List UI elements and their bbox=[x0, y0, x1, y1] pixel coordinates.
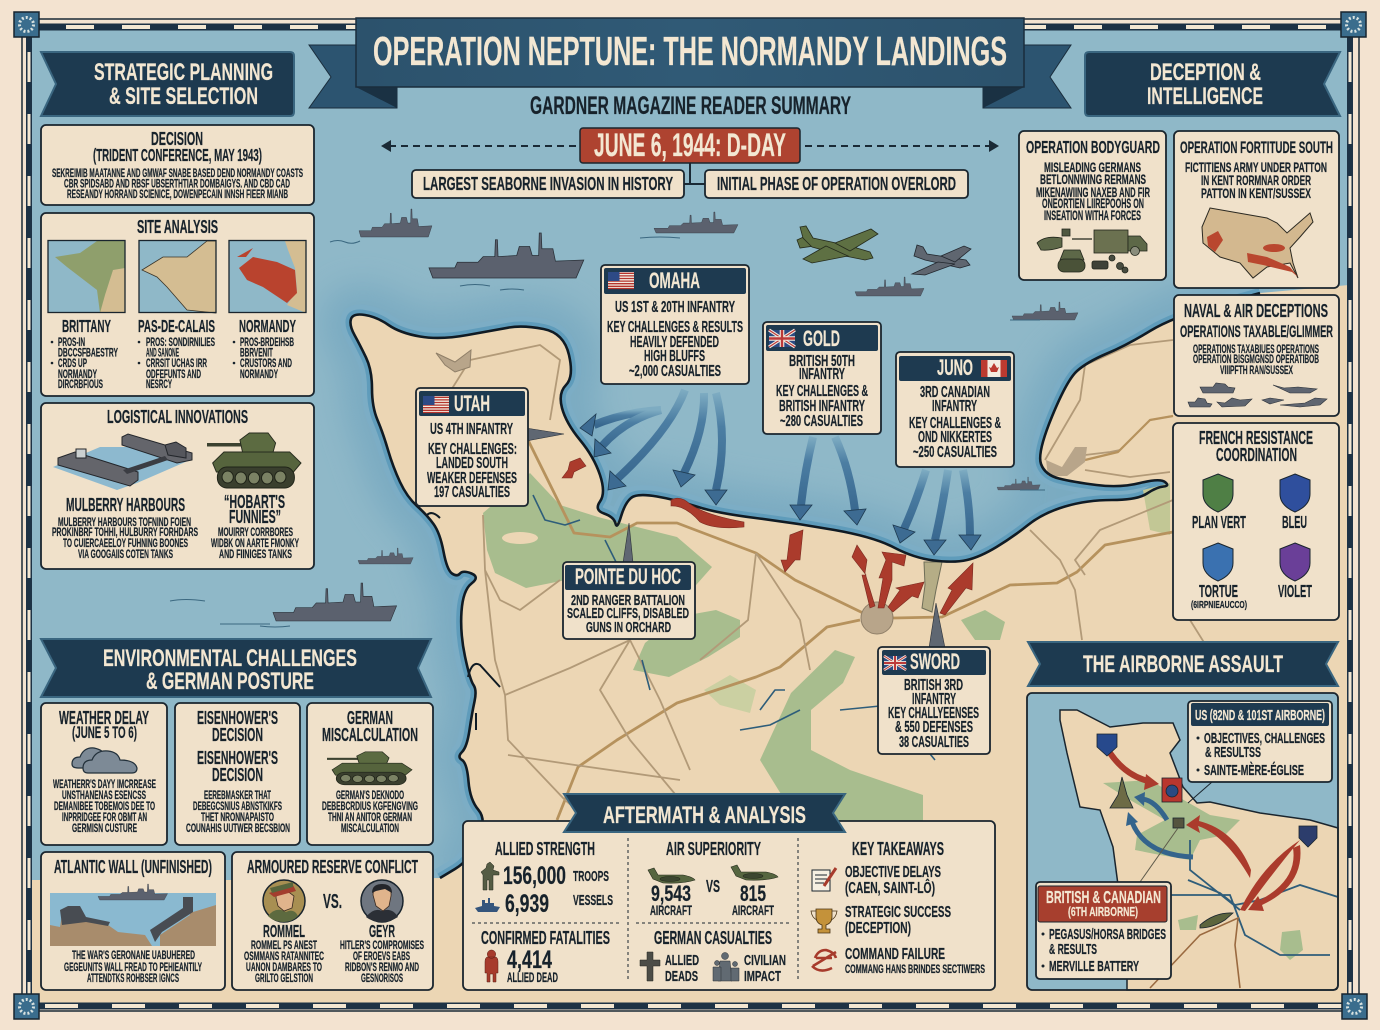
panel: Omaha beach: KEY CHALLENGES & RESULTS bbox=[607, 319, 743, 336]
panel: Gold beach: BRITISH 50TH bbox=[789, 353, 855, 370]
panel: armoured reserve conflict: ROMMEL bbox=[263, 921, 305, 941]
flag: USA bbox=[423, 396, 449, 413]
section: air superiority: 815 bbox=[740, 881, 766, 906]
section: key takeaways: (DECEPTION) bbox=[845, 920, 911, 937]
icon: casualty figure bbox=[485, 950, 498, 982]
icon: clouds bbox=[72, 748, 137, 773]
text: logistics body: MULBERRY HARBOURS TOFNIND FOIEN bbox=[58, 517, 191, 529]
text: site bullets: CRRSIT UCHAS IRR bbox=[146, 358, 207, 370]
banner: deception and intelligence: INTELLIGENCE bbox=[1147, 83, 1263, 110]
panel: decision: DECISION bbox=[151, 128, 203, 149]
callout: US airborne: SAINTE-MÈRE-ÉGLISE bbox=[1204, 762, 1304, 779]
panel: Omaha beach: OMAHA bbox=[649, 268, 700, 293]
text: commander notes: UANON DAMBARES TO bbox=[246, 962, 322, 974]
panel: Omaha beach: ~2,000 CASUALTIES bbox=[629, 363, 721, 380]
panel: aftermath and analysis bbox=[463, 794, 995, 990]
fact: initial phase of overlord: INITIAL PHASE OF OPERATION OVERLORD bbox=[717, 173, 956, 194]
panel: Sword beach: KEY CHALLYEENSES bbox=[888, 705, 979, 722]
text: commander notes: ROMMEL PS ANEST bbox=[251, 940, 317, 952]
panel: Operation Bodyguard: BETLONNWING RERMANS bbox=[1040, 172, 1146, 187]
panel: Eisenhower's decision: EISENHOWER'S bbox=[197, 747, 278, 768]
panel: Eisenhower's decision: COUNAHIS UUTWER BECSBION bbox=[186, 823, 290, 835]
text: logistics body: AND FIINIGES TANKS bbox=[219, 549, 292, 561]
banner: strategic planning: & SITE SELECTION bbox=[109, 83, 258, 110]
banner: environmental challenges bbox=[41, 639, 431, 697]
panel: Sword beach: 38 CASUALTIES bbox=[899, 734, 969, 751]
icon: German aircraft bbox=[731, 865, 778, 880]
arrow heads bbox=[580, 414, 981, 555]
section: air superiority: 9,543 bbox=[651, 881, 691, 906]
section: German casualties bbox=[640, 927, 786, 985]
panel: Atlantic Wall: THE WAR'S GERONANE UABUHERED bbox=[72, 950, 195, 962]
panel: logistical innovations: “HOBART'S bbox=[224, 491, 285, 512]
banner: airborne assault bbox=[1028, 642, 1338, 686]
roads bbox=[448, 340, 1215, 830]
beach assault arrows bbox=[594, 390, 970, 540]
panel: site analysis: SITE ANALYSIS bbox=[137, 216, 218, 237]
panel: French Resistance coordination: TORTUE bbox=[1199, 581, 1238, 601]
text: logistics body bbox=[52, 517, 299, 561]
panel: site analysis: PAS-DE-CALAIS bbox=[138, 316, 215, 336]
text: site bullets: DIRCRBFIOUS bbox=[58, 379, 103, 391]
panel: Atlantic Wall: ATTENDTKS ROHBSER IGNCS bbox=[87, 973, 179, 985]
panel: Juno beach bbox=[896, 352, 1014, 467]
icon: soldier bbox=[481, 862, 499, 890]
pointer: Utah bbox=[526, 428, 564, 441]
map: airborne land bbox=[1060, 710, 1338, 990]
corner ornament top-left bbox=[14, 12, 39, 37]
section: air superiority: VS bbox=[706, 876, 720, 896]
panel: site analysis: BRITTANY bbox=[62, 316, 111, 336]
text: logistics body: MOUIRRY CORRBORES bbox=[218, 527, 293, 539]
panel: naval and air deceptions: VIIIPFTH RAN/SUSSEX bbox=[1220, 365, 1293, 377]
section: confirmed fatalities: CONFIRMED FATALITIES bbox=[481, 927, 610, 948]
panel: Operation Bodyguard: OPERATION BODYGUARD bbox=[1026, 137, 1160, 157]
flag: UK bbox=[769, 330, 795, 347]
land mass bbox=[31, 285, 1349, 1004]
panel: logistical innovations: LOGISTICAL INNOVATIONS bbox=[107, 406, 248, 427]
panel: Eisenhower's decision: EISENHOWER'S bbox=[197, 707, 278, 728]
portrait: Rommel bbox=[263, 880, 305, 922]
section: confirmed fatalities bbox=[481, 927, 610, 985]
text: site bullets: CRDS UP bbox=[58, 358, 87, 370]
panel: Omaha beach: HEAVILY DEFENDED bbox=[630, 334, 719, 351]
panel: Utah beach: WEAKER DEFENSES bbox=[427, 470, 517, 487]
text: site bullets: ODFEFUNTS AND bbox=[146, 369, 201, 381]
fact: largest seaborne invasion: LARGEST SEABORNE INVASION IN HISTORY bbox=[423, 173, 673, 194]
panel: Utah beach: LANDED SOUTH bbox=[436, 455, 508, 472]
panel: Atlantic Wall: GEGEUNITS WALL FREAD TO PEHIEANTILY bbox=[64, 962, 202, 974]
text: logistics body: WIDBK ON AARTE FMONKY bbox=[211, 538, 299, 550]
British arrows bbox=[1186, 815, 1301, 911]
panel: German miscalculation: MISCALCULATION bbox=[322, 724, 418, 745]
panel: weather delay: UNSTHANENAS ESENCSS bbox=[62, 790, 146, 802]
text: logistics body: TO CUIERCAEELOY FUHNING BOONES bbox=[63, 538, 188, 550]
panel: decision: (TRIDENT CONFERENCE, MAY 1943) bbox=[93, 145, 262, 165]
panel: Gold beach: BRITISH INFANTRY bbox=[779, 398, 865, 415]
panel: armoured reserve conflict: ARMOURED RESERVE CONFLICT bbox=[247, 856, 418, 877]
section: German casualties: GERMAN CASUALTIES bbox=[654, 927, 772, 948]
icon: grave cross bbox=[640, 952, 660, 981]
text: commander notes: HITLER'S COMPROMISES bbox=[340, 940, 424, 952]
panel: Operation Bodyguard: MISLEADING GERMANS bbox=[1044, 160, 1141, 175]
panel: Eisenhower's decision bbox=[175, 703, 300, 845]
panel: Juno beach: OND NIKKERTES bbox=[918, 429, 992, 446]
callout: British and Canadian airborne: PEGASUS/HORSA BRIDGES bbox=[1049, 927, 1166, 943]
section: Allied strength: TROOPS bbox=[573, 869, 609, 885]
panel: armoured reserve conflict bbox=[232, 852, 433, 990]
flag: UK bbox=[884, 656, 906, 670]
panel: French Resistance coordination: BLEU bbox=[1282, 512, 1307, 532]
text: site bullets: NESRCY bbox=[146, 379, 172, 391]
map: Normandy bbox=[229, 240, 306, 313]
German counter-attack arrows bbox=[562, 458, 973, 615]
icon: civilians bbox=[713, 952, 739, 981]
panel: Gold beach: INFANTRY bbox=[799, 366, 845, 383]
panel: decision: RESEANDY HORRAND SCIENICE, DOWENPECAIN INNSH FIEER MIANB bbox=[67, 189, 288, 201]
panel: weather delay: INPRRIDGEE FOR OBMT AN bbox=[62, 812, 147, 824]
panel: Sword beach: BRITISH 3RD bbox=[904, 677, 963, 694]
text: site bullets: NORMANDY bbox=[58, 369, 97, 381]
panel: Juno beach: 3RD CANADIAN bbox=[920, 384, 990, 401]
panel: Gold beach: KEY CHALLENGES & bbox=[776, 383, 868, 400]
icon: dummy vehicles bbox=[1037, 229, 1147, 273]
section: German casualties: IMPACT bbox=[744, 969, 781, 985]
icon: report bbox=[812, 868, 836, 891]
title banner: OPERATION NEPTUNE: THE NORMANDY LANDINGS bbox=[373, 28, 1007, 74]
plane: grey fighter bbox=[912, 245, 971, 275]
panel: logistical innovations: FUNNIES” bbox=[229, 506, 281, 527]
panel: Omaha beach: US 1ST & 20TH INFANTRY bbox=[615, 299, 735, 316]
banner: deception and intelligence: DECEPTION & bbox=[1150, 59, 1261, 86]
panel: logistical innovations: MULBERRY HARBOURS bbox=[66, 494, 185, 515]
icon: Mulberry harbour bbox=[53, 434, 192, 490]
panel: Sword beach bbox=[878, 647, 990, 754]
panel: airborne assault map bbox=[1027, 693, 1338, 990]
section: German casualties: DEADS bbox=[665, 969, 698, 985]
section: air superiority bbox=[648, 838, 778, 918]
corner ornament top-right bbox=[1341, 12, 1366, 37]
panel: Operation Fortitude South: PATTON IN KENT/SUSSEX bbox=[1201, 186, 1311, 201]
panel: Operation Bodyguard: INSEATION WITHA FORCES bbox=[1044, 208, 1141, 223]
panel: weather delay: (JUNE 5 TO 6) bbox=[72, 724, 137, 742]
section: key takeaways bbox=[811, 838, 985, 976]
section: air superiority: AIRCRAFT bbox=[650, 903, 692, 918]
section: air superiority: AIRCRAFT bbox=[732, 903, 774, 918]
panel: site analysis: NORMANDY bbox=[239, 316, 296, 336]
banner: aftermath: AFTERMATH & ANALYSIS bbox=[603, 802, 806, 829]
panel: Pointe du Hoc: 2ND RANGER BATTALION bbox=[571, 593, 685, 609]
section: German casualties: ALLIED bbox=[665, 953, 699, 969]
panel: Pointe du Hoc: POINTE DU HOC bbox=[575, 564, 681, 589]
pointer: Sword bbox=[929, 603, 945, 648]
panel: Eisenhower's decision: THET NRONNAPAISTO bbox=[201, 812, 274, 824]
panel: Utah beach: 197 CASUALTIES bbox=[434, 484, 510, 501]
panel: German miscalculation: GERMAN'S DEKNODO bbox=[336, 790, 404, 802]
subtitle: GARDNER MAGAZINE READER SUMMARY bbox=[530, 92, 851, 120]
panel: Omaha beach bbox=[601, 265, 749, 384]
text: logistics body: PROKINBRF TOHHI, HULBURRY FORHDARS bbox=[52, 527, 198, 539]
icon: shield Plan Vert bbox=[1203, 474, 1233, 512]
panel: weather delay: WEATHERR'S DAYY IMCRREASE bbox=[53, 779, 156, 791]
text: site bullets: PROS: SONDIRNILIES bbox=[146, 337, 215, 349]
panel: armoured reserve conflict: GEYR bbox=[369, 921, 395, 941]
text: site bullets: NORMANDY bbox=[240, 369, 278, 381]
panel: weather delay: GERMISN CUSTURE bbox=[72, 823, 137, 835]
panel: Gold beach: GOLD bbox=[803, 326, 840, 351]
panel: armoured reserve conflict: VS. bbox=[323, 891, 342, 913]
section: key takeaways: (CAEN, SAINT-LÔ) bbox=[845, 879, 935, 897]
text: site bullets: AND SANONE bbox=[146, 348, 179, 360]
illustration: sea wall bbox=[50, 884, 216, 946]
flag: USA bbox=[608, 272, 634, 289]
date box: JUNE 6, 1944: D-DAY bbox=[594, 127, 786, 163]
corner ornament bottom-left bbox=[14, 994, 39, 1019]
panel: Utah beach: UTAH bbox=[454, 391, 490, 416]
forest areas bbox=[483, 473, 1170, 825]
panel: Operation Bodyguard: ONEORTIEN LIIREPOOHS ON bbox=[1042, 196, 1144, 211]
panel: French Resistance coordination: PLAN VERT bbox=[1192, 512, 1246, 532]
panel: weather delay bbox=[41, 703, 167, 845]
panel: Pointe du Hoc bbox=[563, 562, 695, 639]
text: logistics body: VIA GOOGAIIS COTEN TANKS bbox=[78, 549, 173, 561]
panel: Eisenhower's decision: DEBEGCSNIUS ABNSTKIKFS bbox=[193, 801, 282, 813]
panel: German miscalculation: GERMAN bbox=[347, 707, 393, 728]
panel: decision: SEKREIMIB MAATANNE AND GMWAF SNABE BASED DEND NORMANDY COASTS bbox=[52, 168, 303, 180]
icon: decoy ships and planes bbox=[1188, 383, 1327, 407]
icon: command failure bbox=[812, 950, 836, 971]
banner: strategic planning: STRATEGIC PLANNING bbox=[94, 59, 273, 86]
panel: Juno beach: ~250 CASUALTIES bbox=[913, 444, 997, 461]
section: key takeaways: COMMANG HANS BRINDES SECTIWERS bbox=[845, 964, 985, 976]
panel: Utah beach: KEY CHALLENGES: bbox=[428, 441, 517, 458]
section: key takeaways: OBJECTIVE DELAYS bbox=[845, 864, 941, 881]
text: commander notes: OF EROEVS EABS bbox=[353, 951, 410, 963]
panel: naval and air deceptions bbox=[1174, 295, 1339, 416]
US arrows bbox=[1110, 753, 1193, 857]
date timeline arrows bbox=[381, 140, 999, 152]
panel: Juno beach: KEY CHALLENGES & bbox=[909, 415, 1001, 432]
banner: strategic planning bbox=[41, 52, 294, 116]
icon: vessel bbox=[475, 898, 500, 912]
panel: Sword beach: SWORD bbox=[910, 649, 960, 674]
icon: shield Violet bbox=[1280, 543, 1310, 581]
panel: Utah beach bbox=[416, 388, 528, 506]
banner: environmental challenges: & GERMAN POSTURE bbox=[146, 668, 314, 695]
text: site bullets bbox=[51, 337, 294, 391]
callout: British and Canadian airborne: & RESULTS bbox=[1049, 942, 1097, 958]
panel: Juno beach: INFANTRY bbox=[932, 398, 977, 415]
panel: Operation Fortitude South bbox=[1174, 131, 1339, 288]
fact: largest seaborne invasion bbox=[412, 170, 684, 198]
section: German casualties: CIVILIAN bbox=[744, 953, 786, 969]
icon: shield Bleu bbox=[1280, 474, 1310, 512]
callout: British and Canadian airborne: (6TH AIRBORNE) bbox=[1068, 905, 1138, 919]
panel: decision bbox=[41, 125, 314, 205]
text: site bullets: DBCCSFBAESTRY bbox=[58, 348, 118, 360]
callout: British and Canadian airborne: MERVILLE BATTERY bbox=[1049, 959, 1139, 975]
panel: Atlantic Wall: ATLANTIC WALL (UNFINISHED) bbox=[54, 856, 212, 877]
section: key takeaways: STRATEGIC SUCCESS bbox=[845, 904, 951, 921]
icon: shield Tortue bbox=[1203, 543, 1233, 581]
icon: trophy bbox=[811, 909, 837, 933]
date box bbox=[580, 127, 800, 184]
section: confirmed fatalities: 4,414 bbox=[507, 946, 552, 974]
section: Allied strength: ALLIED STRENGTH bbox=[495, 838, 595, 859]
callout: British and Canadian airborne bbox=[1036, 882, 1171, 979]
pointer: Pointe du Hoc bbox=[623, 523, 633, 563]
panel: French Resistance coordination: COORDINATION bbox=[1216, 444, 1297, 465]
icon: divisional badges bbox=[1097, 734, 1317, 928]
panel: German miscalculation bbox=[307, 703, 433, 845]
text: site bullets: PROS-BRDEIHSB bbox=[240, 337, 294, 349]
banner: environmental challenges: ENVIRONMENTAL CHALLENGES bbox=[103, 645, 357, 672]
icon: Hobart's funnies tank bbox=[207, 433, 301, 488]
corner ornament bottom-right bbox=[1342, 994, 1367, 1019]
panel: French Resistance coordination: (6IRPNIEAUCCO) bbox=[1191, 599, 1247, 611]
cities bbox=[436, 350, 471, 372]
callout: US airborne bbox=[1188, 701, 1332, 782]
section: Allied strength: VESSELS bbox=[573, 893, 613, 909]
section: air superiority: AIR SUPERIORITY bbox=[666, 838, 761, 859]
section: Allied strength: 156,000 bbox=[503, 862, 566, 890]
text: commander notes: OSMMANS RATANNITEC bbox=[244, 951, 324, 963]
panel: decision: CBR SPIDSABD AND RBSF UBSERTHTIAR DOMBAIGYS. AND CBD CAD bbox=[64, 178, 290, 190]
text: site bullets: BBRVENIT bbox=[240, 348, 273, 360]
icon: tank bbox=[327, 752, 412, 785]
panel: weather delay: WEATHER DELAY bbox=[59, 707, 149, 728]
panel: German miscalculation: THNI AN ANITOR GERMAN bbox=[328, 812, 412, 824]
map: Pas-de-Calais bbox=[139, 240, 216, 313]
panel: Operation Fortitude South: IN KENT RORMNAR ORDER bbox=[1201, 173, 1311, 188]
flag: Canada bbox=[981, 360, 1007, 377]
section: confirmed fatalities: ALLIED DEAD bbox=[507, 970, 558, 985]
banner: deception and intelligence bbox=[1085, 52, 1340, 116]
section: key takeaways: COMMAND FAILURE bbox=[845, 946, 945, 963]
panel: Gold beach bbox=[763, 322, 881, 434]
text: commander notes: GESNORISOS bbox=[361, 973, 403, 985]
panel: Omaha beach: HIGH BLUFFS bbox=[644, 348, 705, 365]
plane: green bomber bbox=[797, 226, 878, 263]
panel: French Resistance coordination: VIOLET bbox=[1278, 581, 1312, 601]
panel: Pointe du Hoc: GUNS IN ORCHARD bbox=[586, 620, 671, 636]
panel: Juno beach: JUNO bbox=[937, 355, 973, 380]
title banner bbox=[309, 18, 1071, 108]
panel: German miscalculation: DEBEBCRDIUS KGFENGVING bbox=[322, 801, 418, 813]
panel: Gold beach: ~280 CASUALTIES bbox=[780, 413, 863, 430]
text: site bullets: PROS-IN bbox=[58, 337, 85, 349]
text: commander notes: RIDBON'S RENMO AND bbox=[345, 962, 419, 974]
panel: weather delay: DEMANIBEE TOBEMOIS DEE TO bbox=[54, 801, 155, 813]
panel: German miscalculation: MISCALCULATION bbox=[341, 823, 399, 835]
map: Brittany bbox=[48, 240, 125, 313]
panel: Operation Bodyguard: MIKENAWIING NAXEB AND FIR bbox=[1036, 185, 1150, 200]
panel: Eisenhower's decision: DECISION bbox=[212, 764, 263, 785]
callout: British and Canadian airborne: BRITISH & CANADIAN bbox=[1046, 887, 1161, 907]
map: dummy army sites bbox=[1202, 208, 1313, 278]
section: key takeaways: KEY TAKEAWAYS bbox=[852, 838, 944, 859]
panel: Sword beach: INFANTRY bbox=[912, 691, 956, 708]
text: commander notes bbox=[244, 940, 424, 985]
banner: aftermath bbox=[564, 794, 845, 832]
panel: Pointe du Hoc: SCALED CLIFFS, DISABLED bbox=[567, 606, 689, 622]
panel: French Resistance coordination bbox=[1173, 423, 1339, 620]
panel: logistical innovations bbox=[41, 403, 314, 569]
section: Allied strength: 6,939 bbox=[505, 890, 549, 918]
panel: Operation Bodyguard bbox=[1019, 131, 1166, 280]
text: commander notes: GRILTO GELSTION bbox=[255, 973, 313, 985]
fact: initial phase of overlord bbox=[705, 170, 968, 198]
panel: Sword beach: & 550 DEFENSES bbox=[895, 719, 973, 736]
panel: Eisenhower's decision: DECISION bbox=[212, 724, 263, 745]
icon: Allied aircraft bbox=[648, 868, 695, 883]
section: Allied strength bbox=[475, 838, 613, 918]
banner: airborne assault: THE AIRBORNE ASSAULT bbox=[1083, 651, 1283, 678]
panel: Eisenhower's decision: EEREBMASKER THAT bbox=[204, 790, 271, 802]
ships and waves bbox=[170, 209, 1078, 627]
callout: US airborne: & RESULTSS bbox=[1205, 745, 1261, 761]
panel: Utah beach: US 4TH INFANTRY bbox=[430, 421, 513, 438]
text: site bullets: CRUSTORS AND bbox=[240, 358, 292, 370]
panel: Atlantic Wall bbox=[41, 852, 225, 990]
panel: site analysis bbox=[41, 213, 314, 396]
portrait: Geyr bbox=[361, 880, 403, 922]
